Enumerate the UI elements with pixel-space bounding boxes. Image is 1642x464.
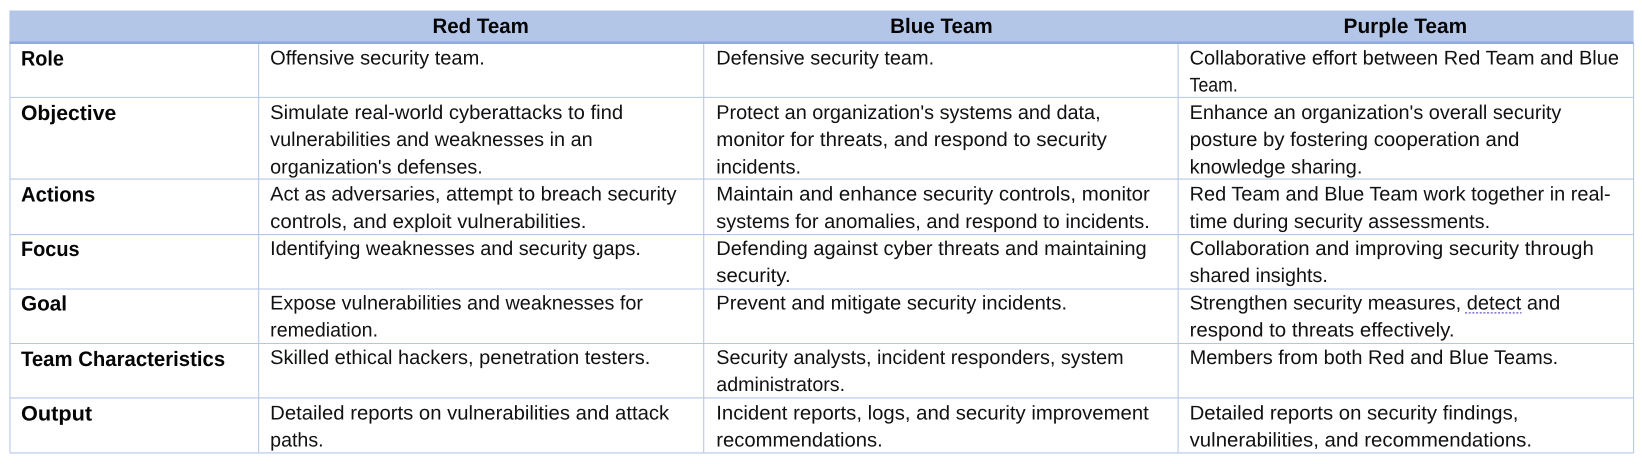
row: Objective: Simulate real-world cyberattacks to find xyxy=(270,102,623,124)
row: Objective: monitor for threats, and respond to security xyxy=(716,129,1107,151)
row: Team Characteristics: Members from both Red and Blue Teams. xyxy=(1190,347,1558,369)
row: Goal: Strengthen security measures, detect and xyxy=(1190,293,1560,315)
row: Actions: time during security assessments. xyxy=(1190,211,1490,233)
row: Role: Collaborative effort between Red Team and Blue xyxy=(1190,48,1619,70)
row: Output: Detailed reports on vulnerabilities and attack xyxy=(270,403,670,425)
row: Focus: Collaboration and improving security through xyxy=(1190,238,1594,260)
row: Output: Output xyxy=(21,403,93,426)
row: Focus: shared insights. xyxy=(1190,265,1328,287)
row: Role: Offensive security team. xyxy=(270,48,485,70)
row: Goal: respond to threats effectively. xyxy=(1190,320,1455,342)
row: Team Characteristics: administrators. xyxy=(716,374,845,396)
row: Objective xyxy=(21,102,1562,179)
row: Focus: security. xyxy=(716,265,791,287)
row: Role xyxy=(21,48,1619,97)
row: Actions xyxy=(21,184,1611,233)
row: Actions: Red Team and Blue Team work together in real- xyxy=(1190,184,1611,206)
row: Objective: Enhance an organization's overall security xyxy=(1190,102,1562,124)
row: Output xyxy=(21,403,1532,452)
row: Focus: Focus xyxy=(21,238,80,261)
row: Team Characteristics: Security analysts, incident responders, system xyxy=(716,347,1124,369)
row: Focus xyxy=(21,238,1594,287)
row: Output: recommendations. xyxy=(716,430,883,452)
row: Objective: knowledge sharing. xyxy=(1190,157,1362,179)
row: Goal: Prevent and mitigate security incidents. xyxy=(716,293,1067,315)
row: Actions: Actions xyxy=(21,184,95,207)
row: Focus: Defending against cyber threats and maintaining xyxy=(716,238,1147,260)
row: Goal xyxy=(21,293,1560,342)
header row xyxy=(9,10,1634,44)
heading: Purple Team: Purple Team xyxy=(1344,15,1467,38)
row: Objective: Objective xyxy=(21,102,116,125)
row: Actions: Act as adversaries, attempt to breach security xyxy=(270,184,677,206)
heading: Red Team: Red Team xyxy=(432,15,529,38)
row: Team Characteristics: Skilled ethical hackers, penetration testers. xyxy=(270,347,650,369)
row: Actions: controls, and exploit vulnerabilities. xyxy=(270,211,586,233)
row: Objective: organization's defenses. xyxy=(270,157,483,179)
row: Team Characteristics: Team Characteristics xyxy=(21,348,225,371)
row: Objective: incidents. xyxy=(716,157,801,179)
heading: Blue Team: Blue Team xyxy=(890,15,993,38)
row: Objective: posture by fostering cooperation and xyxy=(1190,129,1519,151)
row: Role: Team. xyxy=(1190,75,1238,97)
row: Output: Incident reports, logs, and security improvement xyxy=(716,403,1150,425)
row: Objective: Protect an organization's systems and data, xyxy=(716,102,1101,124)
row: Objective: vulnerabilities and weaknesses in an xyxy=(270,129,593,151)
row: Focus: Identifying weaknesses and security gaps. xyxy=(270,238,641,260)
row: Output: vulnerabilities, and recommendations. xyxy=(1190,430,1532,452)
row: Actions: Maintain and enhance security controls, monitor xyxy=(716,184,1151,206)
row: Team Characteristics xyxy=(21,347,1558,396)
row: Role: Role xyxy=(21,48,64,71)
row: Output: Detailed reports on security findings, xyxy=(1190,403,1518,425)
row: Role: Defensive security team. xyxy=(716,48,934,70)
row: Output: paths. xyxy=(270,430,324,452)
row: Goal: Goal xyxy=(21,293,67,316)
row: Actions: systems for anomalies, and respond to incidents. xyxy=(716,211,1150,233)
row: Goal: Expose vulnerabilities and weaknesses for xyxy=(270,293,644,315)
row: Goal: remediation. xyxy=(270,320,378,342)
